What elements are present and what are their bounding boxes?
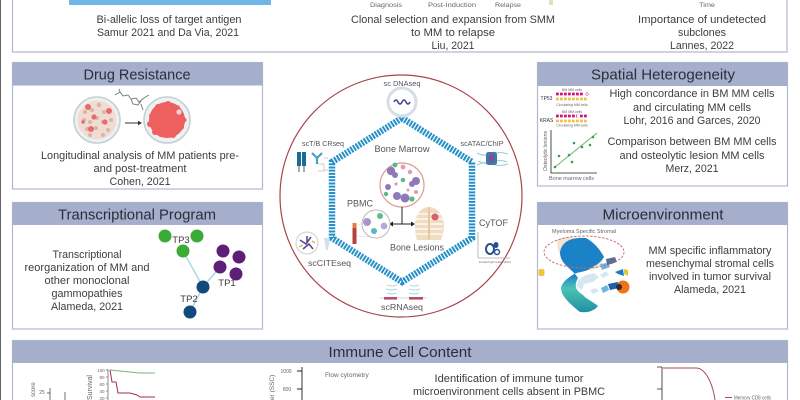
chart: TP53 and KRAS dot rows: BM MM cells xyxy=(562,110,582,114)
heading: drug resistance: Drug Resistance xyxy=(84,68,190,84)
label: PBMC: PBMC xyxy=(347,198,373,210)
chart: memory CD8 cells curve xyxy=(657,367,771,400)
text: transcriptional description: Alameda, 2021 xyxy=(51,301,123,313)
heading: immune cell content: Immune Cell Content xyxy=(328,345,472,361)
text: clonal selection: Clonal selection and expansion from SMM xyxy=(351,14,555,26)
text: comparison: Comparison between BM MM cells xyxy=(608,136,777,148)
text: undetected subclones: Lannes, 2022 xyxy=(670,40,734,52)
text: drug resistance description: Longitudinal analysis of MM patients pre- xyxy=(41,150,239,162)
chart: TP53 and KRAS dot rows: Circulating MM cells xyxy=(556,103,588,107)
chart: flow cytometry plot: 1000 xyxy=(280,369,292,375)
text: microenvironment description: mesenchymal stromal cells xyxy=(646,258,774,270)
text: transcriptional description: other monoclonal xyxy=(44,275,130,287)
text: concordance: High concordance in BM MM cells xyxy=(610,88,775,100)
icon: petri dish before treatment xyxy=(74,97,120,143)
chart: clonal selection time axis labels: Post-Induction xyxy=(428,3,476,9)
text: drug resistance description: and post-treatment xyxy=(94,163,186,175)
label: sc DNAseq: sc DNAseq xyxy=(384,79,420,88)
chart: TP53 and KRAS dot rows xyxy=(540,88,588,128)
panel: central technologies diagram xyxy=(280,75,522,317)
text: drug resistance description xyxy=(41,150,239,188)
icon: DNA circle xyxy=(388,88,416,116)
text: microenvironment description: Alameda, 2021 xyxy=(674,284,746,296)
chart: clonal selection time axis labels: Diagnosis xyxy=(370,3,402,9)
chart: survival curves: 100 xyxy=(97,368,105,373)
text: clonal selection: Liu, 2021 xyxy=(432,40,474,52)
chart: flow cytometry plot: 800 xyxy=(283,387,291,393)
text: bi-allelic loss xyxy=(96,14,242,39)
panel: transcriptional program xyxy=(12,202,262,329)
chart: survival curves: Survival xyxy=(87,375,94,400)
panel: spatial heterogeneity xyxy=(538,62,788,186)
text: bi-allelic loss: Bi-allelic loss of target antigen xyxy=(96,14,242,26)
icon: CITE-seq antibody cell xyxy=(296,232,330,254)
text: drug resistance description: Cohen, 2021 xyxy=(110,176,170,188)
text: bi-allelic loss: Samur 2021 and Da Via, 2021 xyxy=(97,27,239,39)
text: transcriptional description xyxy=(24,249,150,313)
label: scRNAseq: scRNAseq xyxy=(381,302,423,312)
chart: TP53 and KRAS dot rows: KRAS xyxy=(540,118,554,124)
arrow: treatment xyxy=(125,121,142,125)
chart: UMAP of stromal cells: Myeloma Specific Stromal xyxy=(552,229,616,235)
icon: chromatin xyxy=(477,152,508,166)
text: immune description xyxy=(413,373,605,400)
text: microenvironment description: involved in tumor survival xyxy=(649,271,771,283)
label: scCITEseq: scCITEseq xyxy=(308,259,351,268)
chart: allelic loss colour bar xyxy=(69,0,271,5)
icon: rib cage with lesion xyxy=(415,207,444,240)
text: comparison: Merz, 2021 xyxy=(666,163,718,175)
icon: spliced RNA xyxy=(380,285,427,300)
hexagon: sample boundary xyxy=(332,118,472,282)
icon: molecule xyxy=(115,89,149,110)
text: undetected subclones xyxy=(638,14,766,52)
chart: survival curves: 40 xyxy=(99,389,105,394)
chart: flow cytometry plot xyxy=(269,367,369,400)
icon: petri dish after treatment xyxy=(144,97,190,143)
chart: CyTOF scatter: Forward light scatter (FSC) xyxy=(479,260,511,264)
chart: score plot xyxy=(31,382,65,400)
text: immune description: Identification of immune tumor xyxy=(434,373,584,385)
text: transcriptional description: Transcriptional xyxy=(52,249,122,261)
chart: flow cytometry plot: Flow cytometry xyxy=(325,372,369,379)
text: undetected subclones: subclones xyxy=(678,27,726,39)
text: transcriptional description: gammopathies xyxy=(52,288,123,300)
chart: CyTOF scatter xyxy=(478,232,511,264)
chart: TP53 and KRAS dot rows: TP53 xyxy=(541,96,553,102)
icon: T and B cell receptors xyxy=(297,152,328,172)
label: scATAC/ChIP: scATAC/ChIP xyxy=(460,139,504,148)
icon: PBMC cells xyxy=(362,210,390,238)
chart: score plot: 25 xyxy=(39,390,45,396)
label: CyTOF: CyTOF xyxy=(479,218,508,229)
chart: bone marrow vs osteolytic scatter xyxy=(543,130,597,182)
panel: immune cell content xyxy=(12,340,788,400)
icon: bone marrow cells xyxy=(380,163,424,207)
text: concordance: and circulating MM cells xyxy=(633,102,752,114)
chart: trajectory of TP1 TP2 TP3: TP1 xyxy=(218,278,236,289)
chart: TP53 and KRAS dot rows: BM MM cells xyxy=(562,88,582,92)
text: comparison xyxy=(608,136,777,175)
icon: blood tube xyxy=(352,217,372,244)
text: microenvironment description xyxy=(646,245,774,296)
chart: trajectory of TP1 TP2 TP3: TP2 xyxy=(180,294,198,305)
text: concordance: Lohr, 2016 and Garces, 2020 xyxy=(624,115,760,127)
label: scT/B CRseq: scT/B CRseq xyxy=(302,139,344,148)
heading: microenvironment: Microenvironment xyxy=(602,208,724,224)
chart: trajectory of TP1 TP2 TP3 xyxy=(158,230,246,318)
chart: TP53 and KRAS dot rows: Circulating MM cells xyxy=(556,124,588,128)
chart: clonal selection time axis labels: Relapse xyxy=(495,3,522,9)
chart: clonal selection time axis labels xyxy=(370,0,553,9)
text: comparison: and osteolytic lesion MM cells xyxy=(620,150,765,162)
text: concordance xyxy=(610,88,775,127)
arrow: marrow to PBMC and bone lesions xyxy=(389,207,415,226)
heading: transcriptional program: Transcriptional Program xyxy=(58,208,216,224)
label: Bone Lesions: Bone Lesions xyxy=(390,242,444,254)
text: clonal selection xyxy=(351,14,555,52)
chart: trajectory of TP1 TP2 TP3: TP3 xyxy=(172,235,190,246)
panel: microenvironment xyxy=(538,202,788,329)
heading: spatial heterogeneity: Spatial Heterogeneity xyxy=(591,68,736,84)
chart: score plot: score xyxy=(31,382,37,397)
text: undetected subclones: Importance of undetected xyxy=(638,14,766,26)
chart: bone marrow vs osteolytic scatter: Osteolytic lesions xyxy=(543,130,549,171)
chart: bone marrow vs osteolytic scatter: Bone marrow cells xyxy=(549,176,595,182)
chart: subclones time label: Time xyxy=(699,3,716,9)
text: clonal selection: to MM to relapse xyxy=(411,27,495,39)
chart: flow cytometry plot: er (SSC) xyxy=(269,375,276,400)
text: transcriptional description: reorganization of MM and xyxy=(24,262,150,274)
label: Bone Marrow: Bone Marrow xyxy=(374,144,430,155)
text: immune description: microenvironment cells absent in PBMC xyxy=(413,386,605,398)
panel: clonal heterogeneity (cropped top) xyxy=(12,0,787,52)
chart: survival curves: 80 xyxy=(99,375,105,380)
panel: drug resistance xyxy=(12,62,262,189)
chart: UMAP of stromal cells xyxy=(538,229,630,312)
chart: survival curves: 60 xyxy=(99,382,105,387)
text: microenvironment description: MM specific inflammatory xyxy=(648,245,772,257)
chart: survival curves xyxy=(87,368,155,400)
